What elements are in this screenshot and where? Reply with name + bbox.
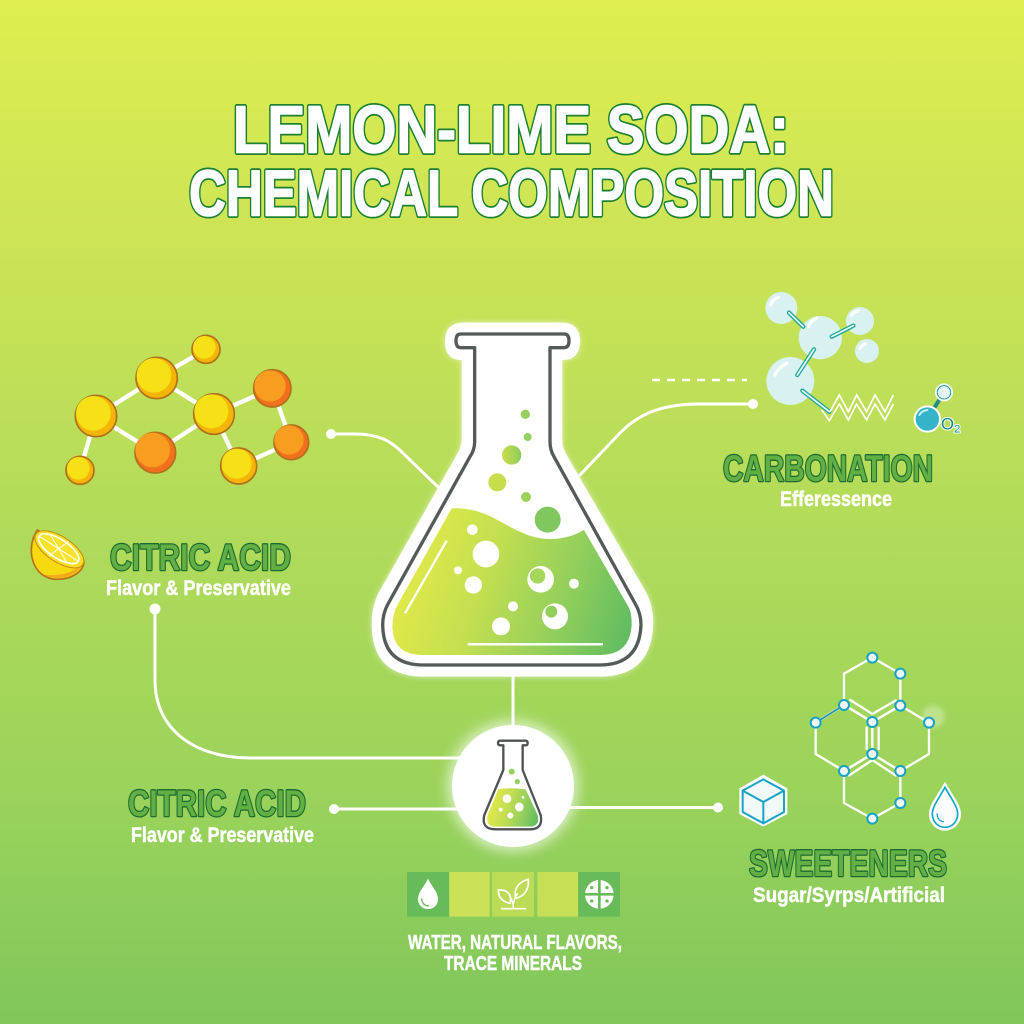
- label: carbonation: [723, 448, 933, 511]
- label: water, natural flavors, trace minerals: WATER, NATURAL FLAVORS,: [408, 932, 622, 954]
- icon: oxygen molecule: 2: [954, 424, 960, 436]
- label: citric acid lower: CITRIC ACID: [128, 783, 306, 824]
- label: citric acid lower: CITRIC ACID: [128, 783, 306, 824]
- label: citric acid top: Flavor & Preservative: [106, 577, 291, 600]
- label: citric acid lower: [128, 783, 314, 847]
- connector lines: [150, 380, 758, 814]
- label: citric acid top: [106, 537, 291, 600]
- label: citric acid top: CITRIC ACID: [110, 537, 291, 578]
- label: carbonation: CARBONATION: [723, 448, 933, 489]
- icon: sweetener hexagons: [811, 653, 945, 824]
- label: water, natural flavors, trace minerals: [408, 932, 622, 975]
- label: water, natural flavors, trace minerals: TRACE MINERALS: [444, 953, 582, 975]
- title: LEMON-LIME SODA:: [233, 93, 789, 168]
- icon: oxygen molecule: O: [941, 414, 954, 433]
- label: sweeteners: [749, 843, 947, 907]
- label: citric acid lower: Flavor & Preservative: [131, 824, 314, 847]
- label: carbonation: CARBONATION: [723, 448, 933, 489]
- label: carbonation: Efferessence: [780, 488, 892, 511]
- icon: lemon half: [29, 523, 90, 579]
- label: sweeteners: SWEETENERS: [749, 843, 947, 884]
- icon: oxygen molecule: [915, 384, 960, 436]
- icon: sugar cube: [739, 775, 787, 827]
- label: sweeteners: Sugar/Syrps/Artificial: [753, 884, 945, 907]
- title: CHEMICAL COMPOSITION: [189, 157, 834, 230]
- icon: citric acid molecule: [66, 335, 309, 484]
- title: [189, 93, 834, 230]
- label: citric acid top: CITRIC ACID: [110, 537, 291, 578]
- icon: central flask: [372, 323, 653, 677]
- title: LEMON-LIME SODA:: [233, 93, 789, 168]
- icon: carbonation molecule: [765, 292, 893, 421]
- title: CHEMICAL COMPOSITION: [189, 157, 834, 230]
- icon: hub circle with small flask: [447, 720, 579, 852]
- icon: water drop: [929, 782, 961, 831]
- icon row: ingredients: [407, 872, 620, 917]
- label: sweeteners: SWEETENERS: [749, 843, 947, 884]
